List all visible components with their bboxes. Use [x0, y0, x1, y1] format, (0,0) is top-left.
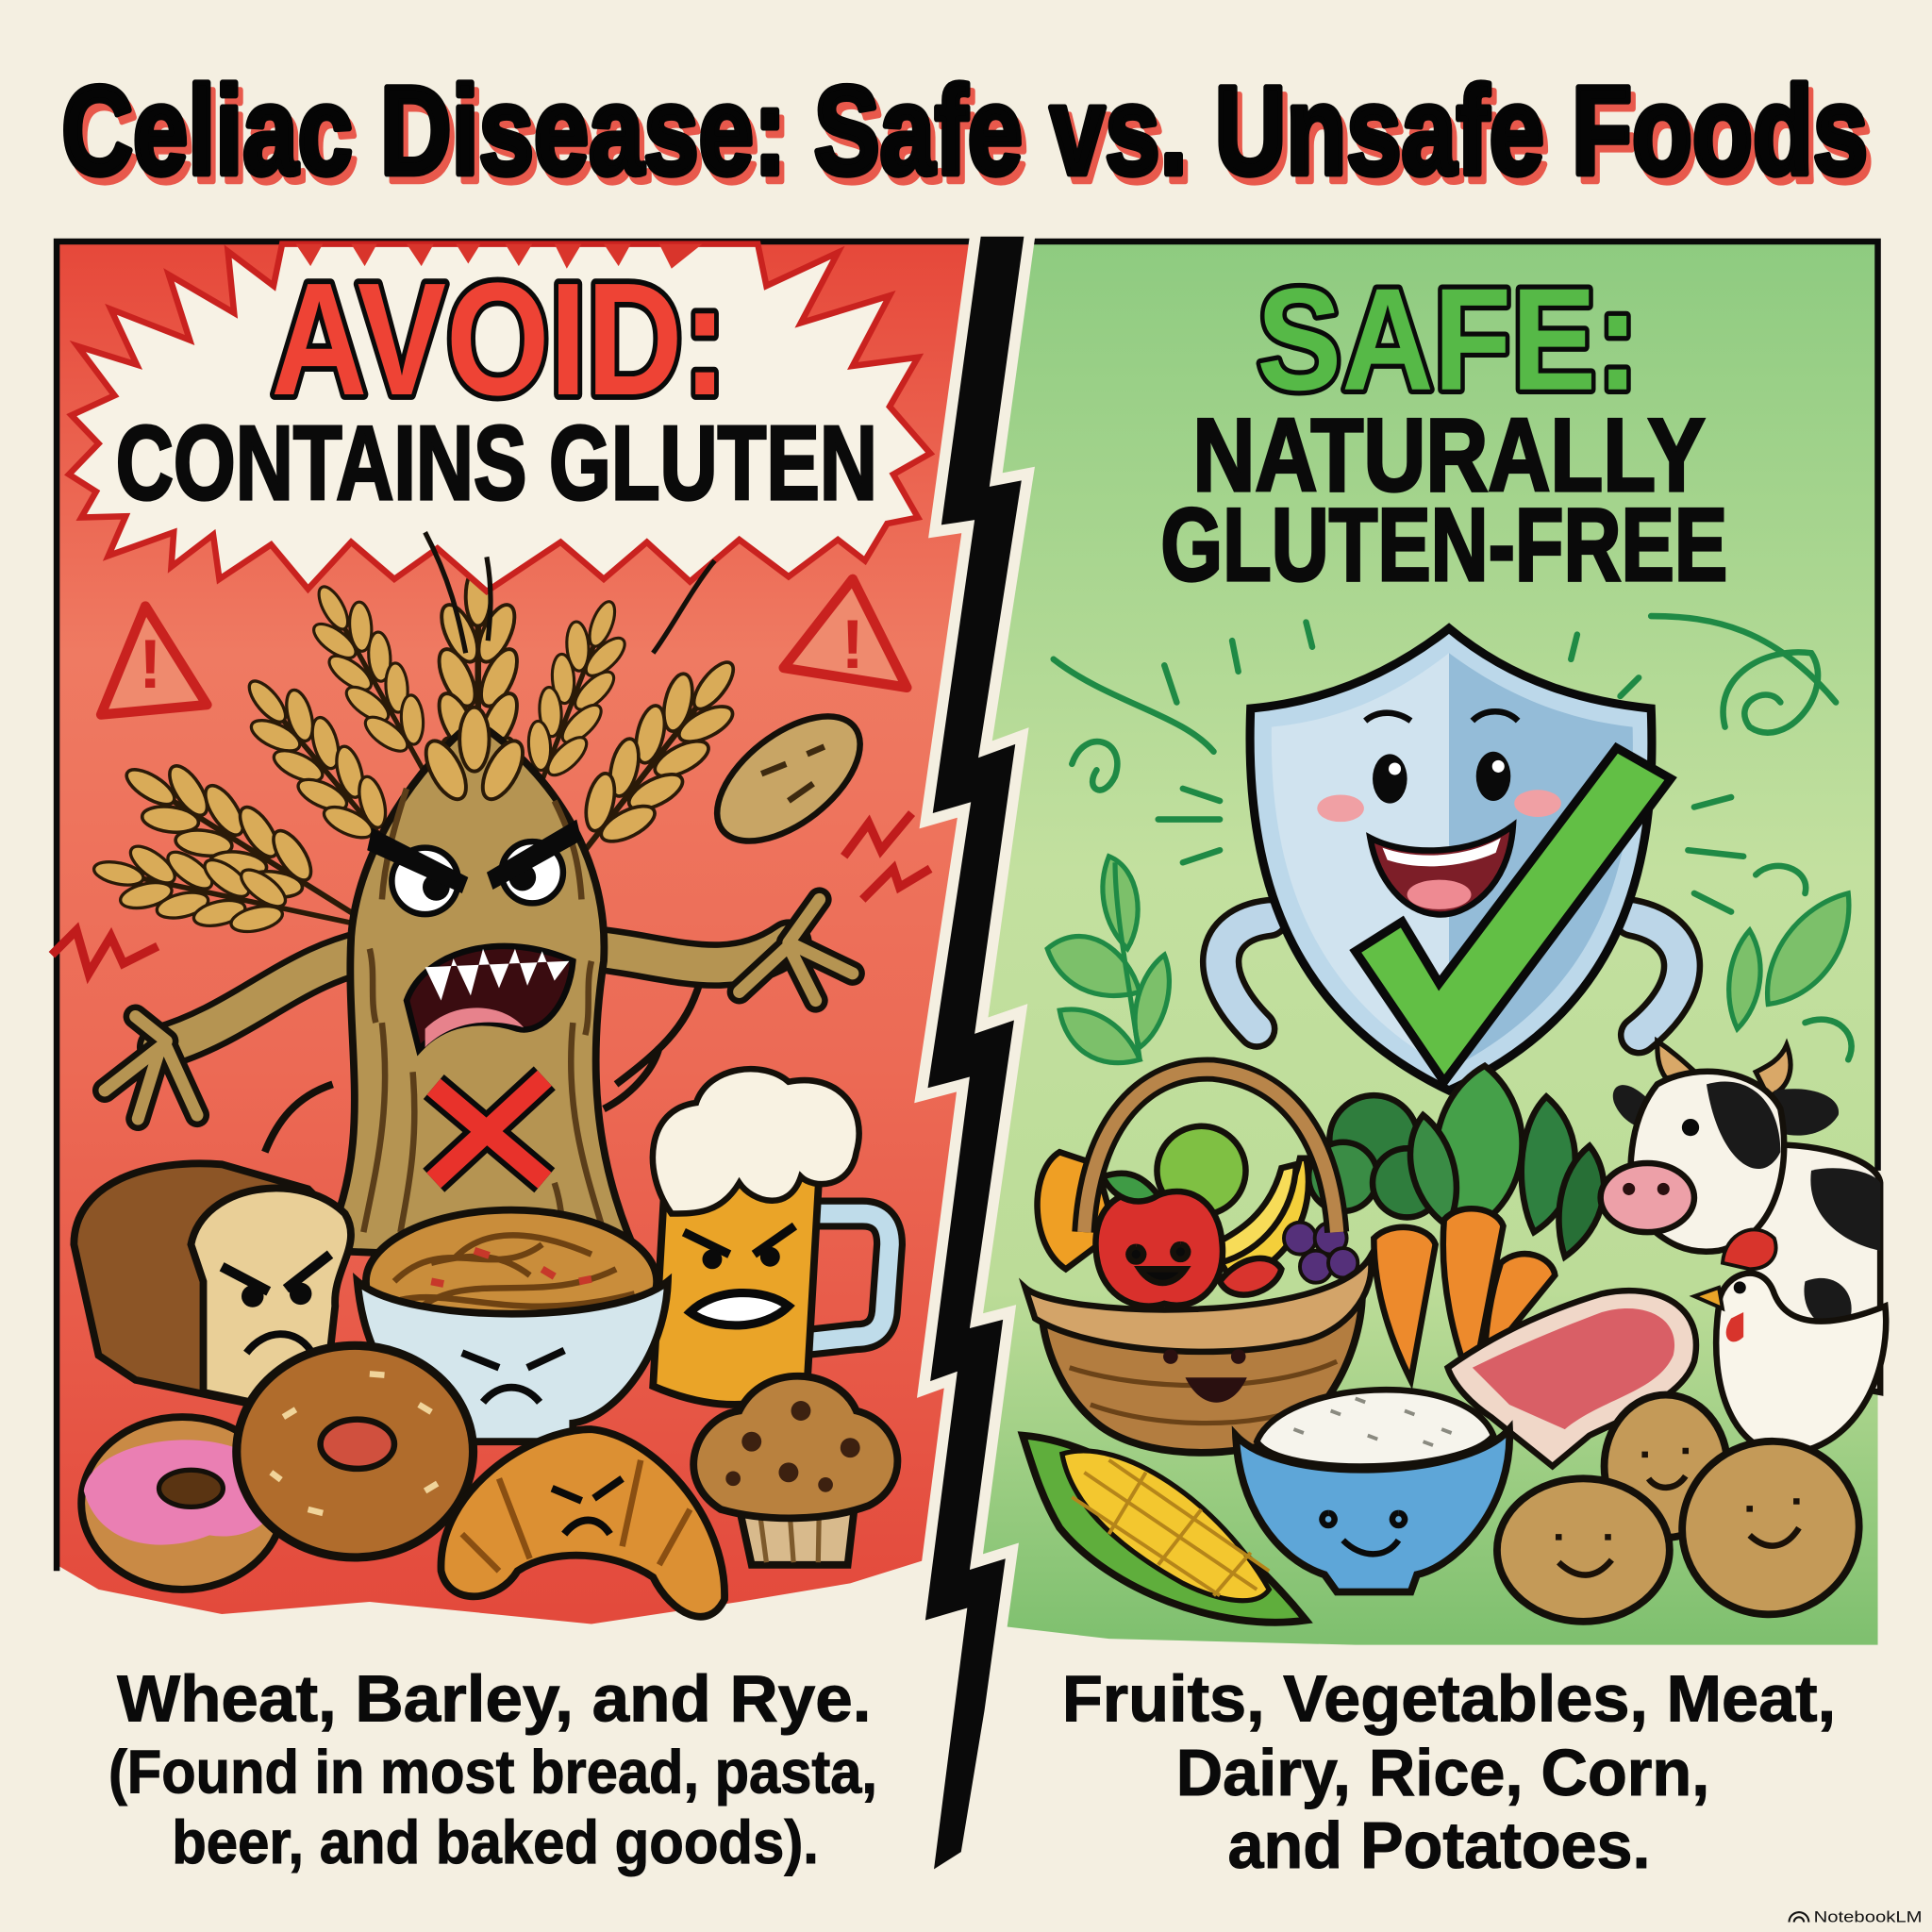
icon: warning triangle left: !: [139, 626, 162, 703]
panel: safe: [969, 242, 1886, 1645]
arms: [1221, 918, 1682, 1035]
illustration: wheat monster: [86, 567, 853, 1263]
wheat ears: [86, 567, 765, 961]
decorative green swirls and leaves: [1054, 616, 1852, 1059]
icon: warning triangle right: [784, 579, 907, 688]
burst top teeth: [295, 244, 702, 269]
text block: safe foods: and Potatoes.: [1228, 1808, 1651, 1882]
body spots: [1810, 1168, 1880, 1251]
shield left inner: [1272, 653, 1449, 1070]
illustration: basket: [1025, 1070, 1371, 1453]
text block: avoid foods: Wheat, Barley, and Rye.: [117, 1662, 871, 1736]
illustration: chicken: [1694, 1229, 1886, 1454]
mouth: [407, 946, 573, 1050]
subheading: naturally gluten-free: [1160, 398, 1727, 603]
subheading: contains gluten: CONTAINS GLUTEN: [116, 404, 877, 522]
ears: [1613, 1085, 1663, 1129]
potato faces: [1558, 1448, 1799, 1575]
icon: warning triangle right: !: [841, 607, 864, 683]
icon: warning triangle left: [101, 607, 207, 715]
burst: avoid callout: [69, 244, 930, 591]
wisps: [265, 974, 702, 1152]
horns: [1657, 1041, 1790, 1096]
body: [1750, 1144, 1880, 1392]
beer face: [684, 1226, 794, 1325]
glass: [653, 1171, 820, 1405]
illustration: bagel: [237, 1345, 474, 1557]
illustration: rice bowl: [1236, 1390, 1509, 1592]
green apple: [1157, 1126, 1245, 1215]
text block: avoid foods: [108, 1662, 877, 1876]
red apple: [1095, 1191, 1223, 1307]
illustration: happy shield with check: [1221, 628, 1682, 1091]
lightning bolt: [925, 237, 1024, 1869]
illustration: angry bread loaf: [74, 1163, 351, 1417]
shield body: [1250, 628, 1652, 1091]
foam: [653, 1069, 859, 1214]
trunk: [323, 721, 641, 1263]
notebooklm credit: [1789, 1908, 1923, 1926]
face: [1317, 711, 1561, 914]
handle: [801, 1214, 890, 1343]
icon: leaves right: [1729, 893, 1849, 1029]
illustration: leafy greens: [1308, 1066, 1604, 1257]
shield right shade: [1449, 653, 1633, 1070]
text block: safe foods: [1062, 1662, 1836, 1882]
arms: [105, 899, 853, 1119]
illustration: pink donut: [81, 1417, 283, 1590]
text block: safe foods: Fruits, Vegetables, Meat,: [1062, 1662, 1836, 1736]
illustration: floating bread: [695, 692, 882, 865]
text block: avoid foods: beer, and baked goods).: [172, 1807, 819, 1876]
check mark: [1356, 748, 1671, 1082]
subheading: naturally gluten-free: NATURALLY: [1192, 398, 1706, 513]
illustration: angry beer: [653, 1069, 890, 1405]
illustration: corn: [1023, 1436, 1306, 1623]
panel border: [57, 242, 981, 1571]
text block: avoid foods: (Found in most bread, pasta,: [108, 1737, 877, 1806]
head: [1630, 1072, 1784, 1252]
text block: safe foods: Dairy, Rice, Corn,: [1176, 1736, 1709, 1809]
illustration: pasta bowl: [358, 1210, 668, 1441]
icon: leaves left: [1047, 857, 1169, 1063]
illustration: fruit: [1038, 1126, 1357, 1307]
red x: [434, 1078, 544, 1180]
panel background red: [57, 242, 981, 1624]
bark lines: [363, 789, 604, 1232]
panel border: [1033, 242, 1878, 1171]
muzzle: [1601, 1163, 1694, 1232]
illustration: muffin: [693, 1376, 897, 1565]
heading: AVOID: AVOID:: [271, 249, 727, 428]
illustration: carrots: [1374, 1208, 1555, 1386]
wheat tips over burst: [425, 532, 715, 653]
heading: SAFE: SAFE:: [1257, 258, 1639, 421]
strawberries and grapes: [1220, 1258, 1281, 1295]
orange: [1038, 1152, 1115, 1269]
illustration: cow: [1601, 1041, 1880, 1392]
illustration: croissant: [441, 1429, 724, 1617]
banana: [1214, 1158, 1308, 1281]
subheading: naturally gluten-free: GLUTEN-FREE: [1160, 488, 1727, 603]
apple face: [1128, 1244, 1188, 1283]
eyes: [367, 820, 581, 914]
zigzag anger marks: [52, 813, 930, 974]
notebooklm credit: NotebookLM: [1814, 1908, 1923, 1926]
illustration: steak: [1448, 1291, 1696, 1466]
illustration: potatoes: [1497, 1395, 1884, 1640]
apple leaf: [1103, 1174, 1158, 1201]
panel: avoid: [52, 242, 981, 1624]
panel background green: [969, 242, 1878, 1645]
leaves on head: [418, 708, 531, 806]
